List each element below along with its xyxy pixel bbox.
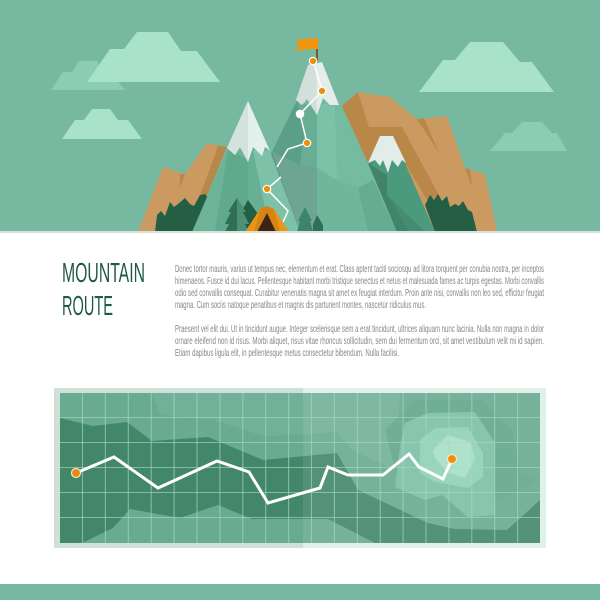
- body text: magna. Cum sociis natoque penatibus et magnis dis parturient montes, nascetur ridiculus mus.: [175, 300, 426, 311]
- small cloud right: [490, 122, 567, 151]
- main mountain: [240, 60, 397, 232]
- pine trees: [225, 198, 323, 232]
- title: ROUTE: [62, 290, 113, 321]
- divider under illustration: [0, 231, 600, 233]
- waypoints: [263, 57, 326, 193]
- map panel: [54, 388, 546, 548]
- left rock: [138, 143, 227, 232]
- body text: [175, 264, 544, 359]
- tent: [245, 206, 289, 232]
- back cloud left: [51, 61, 125, 90]
- panel: sky illustration: [0, 0, 600, 232]
- map terrain upper light band: [128, 393, 400, 470]
- snow cap front mountain: [227, 101, 270, 162]
- lighter right half overlay: [303, 393, 540, 543]
- third mountain: [368, 135, 435, 232]
- title: [62, 257, 145, 321]
- footer bar: [0, 584, 600, 600]
- map dark valley band: [60, 418, 540, 543]
- map start point: [72, 468, 80, 478]
- route on mountain: [263, 38, 326, 222]
- map end point: [448, 454, 456, 464]
- front mountain: [192, 101, 300, 232]
- big cloud left: [87, 32, 220, 82]
- right rock: [342, 92, 497, 232]
- snow cap main mountain: [296, 62, 339, 115]
- right forest: [425, 194, 477, 232]
- map grid: [60, 393, 540, 543]
- body text: Etiam dapibus ligula elit, in pellentesque metus consectetur bibendum. Nulla facilisi.: [175, 348, 399, 359]
- left forest: [155, 194, 210, 232]
- small cloud left: [62, 109, 142, 139]
- big cloud right: [419, 42, 554, 92]
- map route line: [76, 454, 452, 503]
- map peak contours: [385, 400, 540, 517]
- title: MOUNTAIN: [62, 257, 145, 288]
- flag: [295, 38, 318, 61]
- snow cap third mountain: [368, 136, 406, 173]
